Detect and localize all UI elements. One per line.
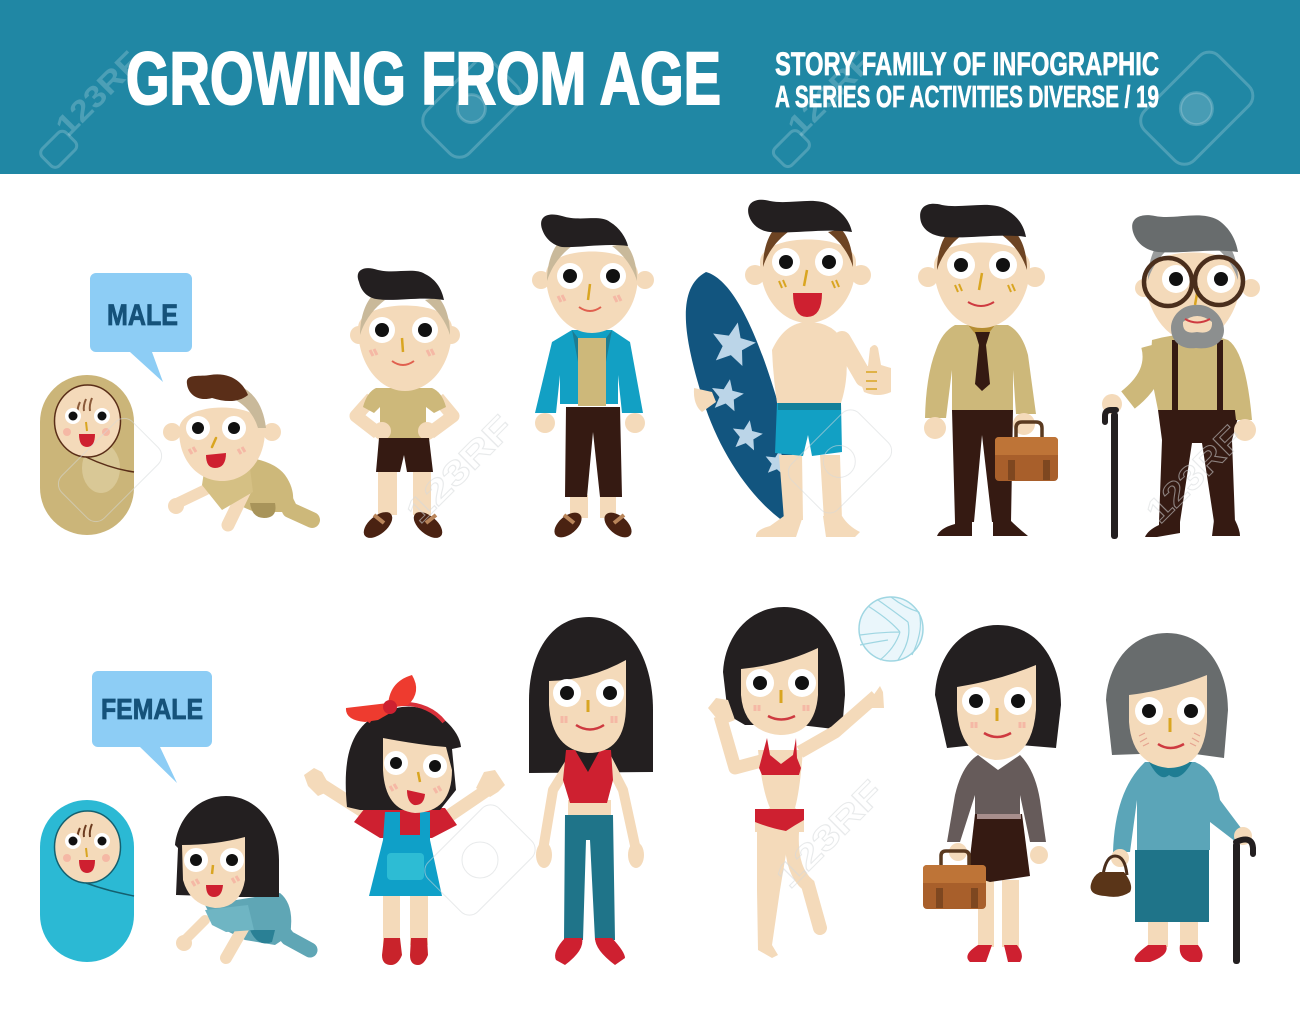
speech bubble: female: FEMALE — [101, 694, 203, 726]
speech bubble: male — [90, 273, 192, 382]
watermark marks: 123RF — [1139, 419, 1251, 531]
icon: glasses — [1144, 257, 1243, 306]
icon: red bow — [346, 675, 416, 722]
subtitle: STORY FAMILY OF INFOGRAPHIC — [775, 46, 1159, 82]
watermark marks: 123RF — [399, 408, 521, 531]
watermark marks — [53, 405, 1251, 920]
icon: beard — [1171, 305, 1224, 348]
icon: cane — [1233, 840, 1253, 964]
icon: handbag — [1091, 856, 1131, 897]
icon: briefcase — [995, 422, 1058, 481]
figure: grandfather — [1102, 215, 1260, 539]
figure: surfer man — [686, 200, 891, 537]
speech bubble: male: MALE — [107, 299, 178, 332]
figure: young girl with bow — [304, 675, 505, 965]
figure: woman playing volleyball — [708, 607, 884, 958]
figure: swaddled baby girl — [40, 800, 134, 962]
figure: grandmother — [1091, 633, 1253, 964]
figure: crawling baby boy — [163, 374, 312, 525]
figure: teenage boy — [532, 215, 654, 542]
speech bubble: female — [92, 671, 212, 783]
icon: volleyball — [859, 597, 923, 661]
icon: briefcase — [923, 851, 986, 909]
icon: surfboard — [686, 272, 799, 527]
figure: crawling baby girl — [175, 796, 310, 958]
header banner: 123RF — [782, 45, 879, 143]
subtitle — [775, 46, 1159, 114]
figure: swaddled baby boy — [40, 375, 134, 535]
header banner: 123RF — [50, 45, 147, 143]
watermark marks: 123RF — [769, 773, 891, 896]
header banner — [0, 0, 1300, 174]
icon: cane — [1105, 410, 1118, 539]
figure: businesswoman — [923, 625, 1061, 962]
figure: young woman — [529, 617, 653, 965]
figure: boy — [350, 268, 460, 543]
title: GROWING FROM AGE — [126, 37, 721, 120]
figure: businessman — [918, 204, 1058, 536]
